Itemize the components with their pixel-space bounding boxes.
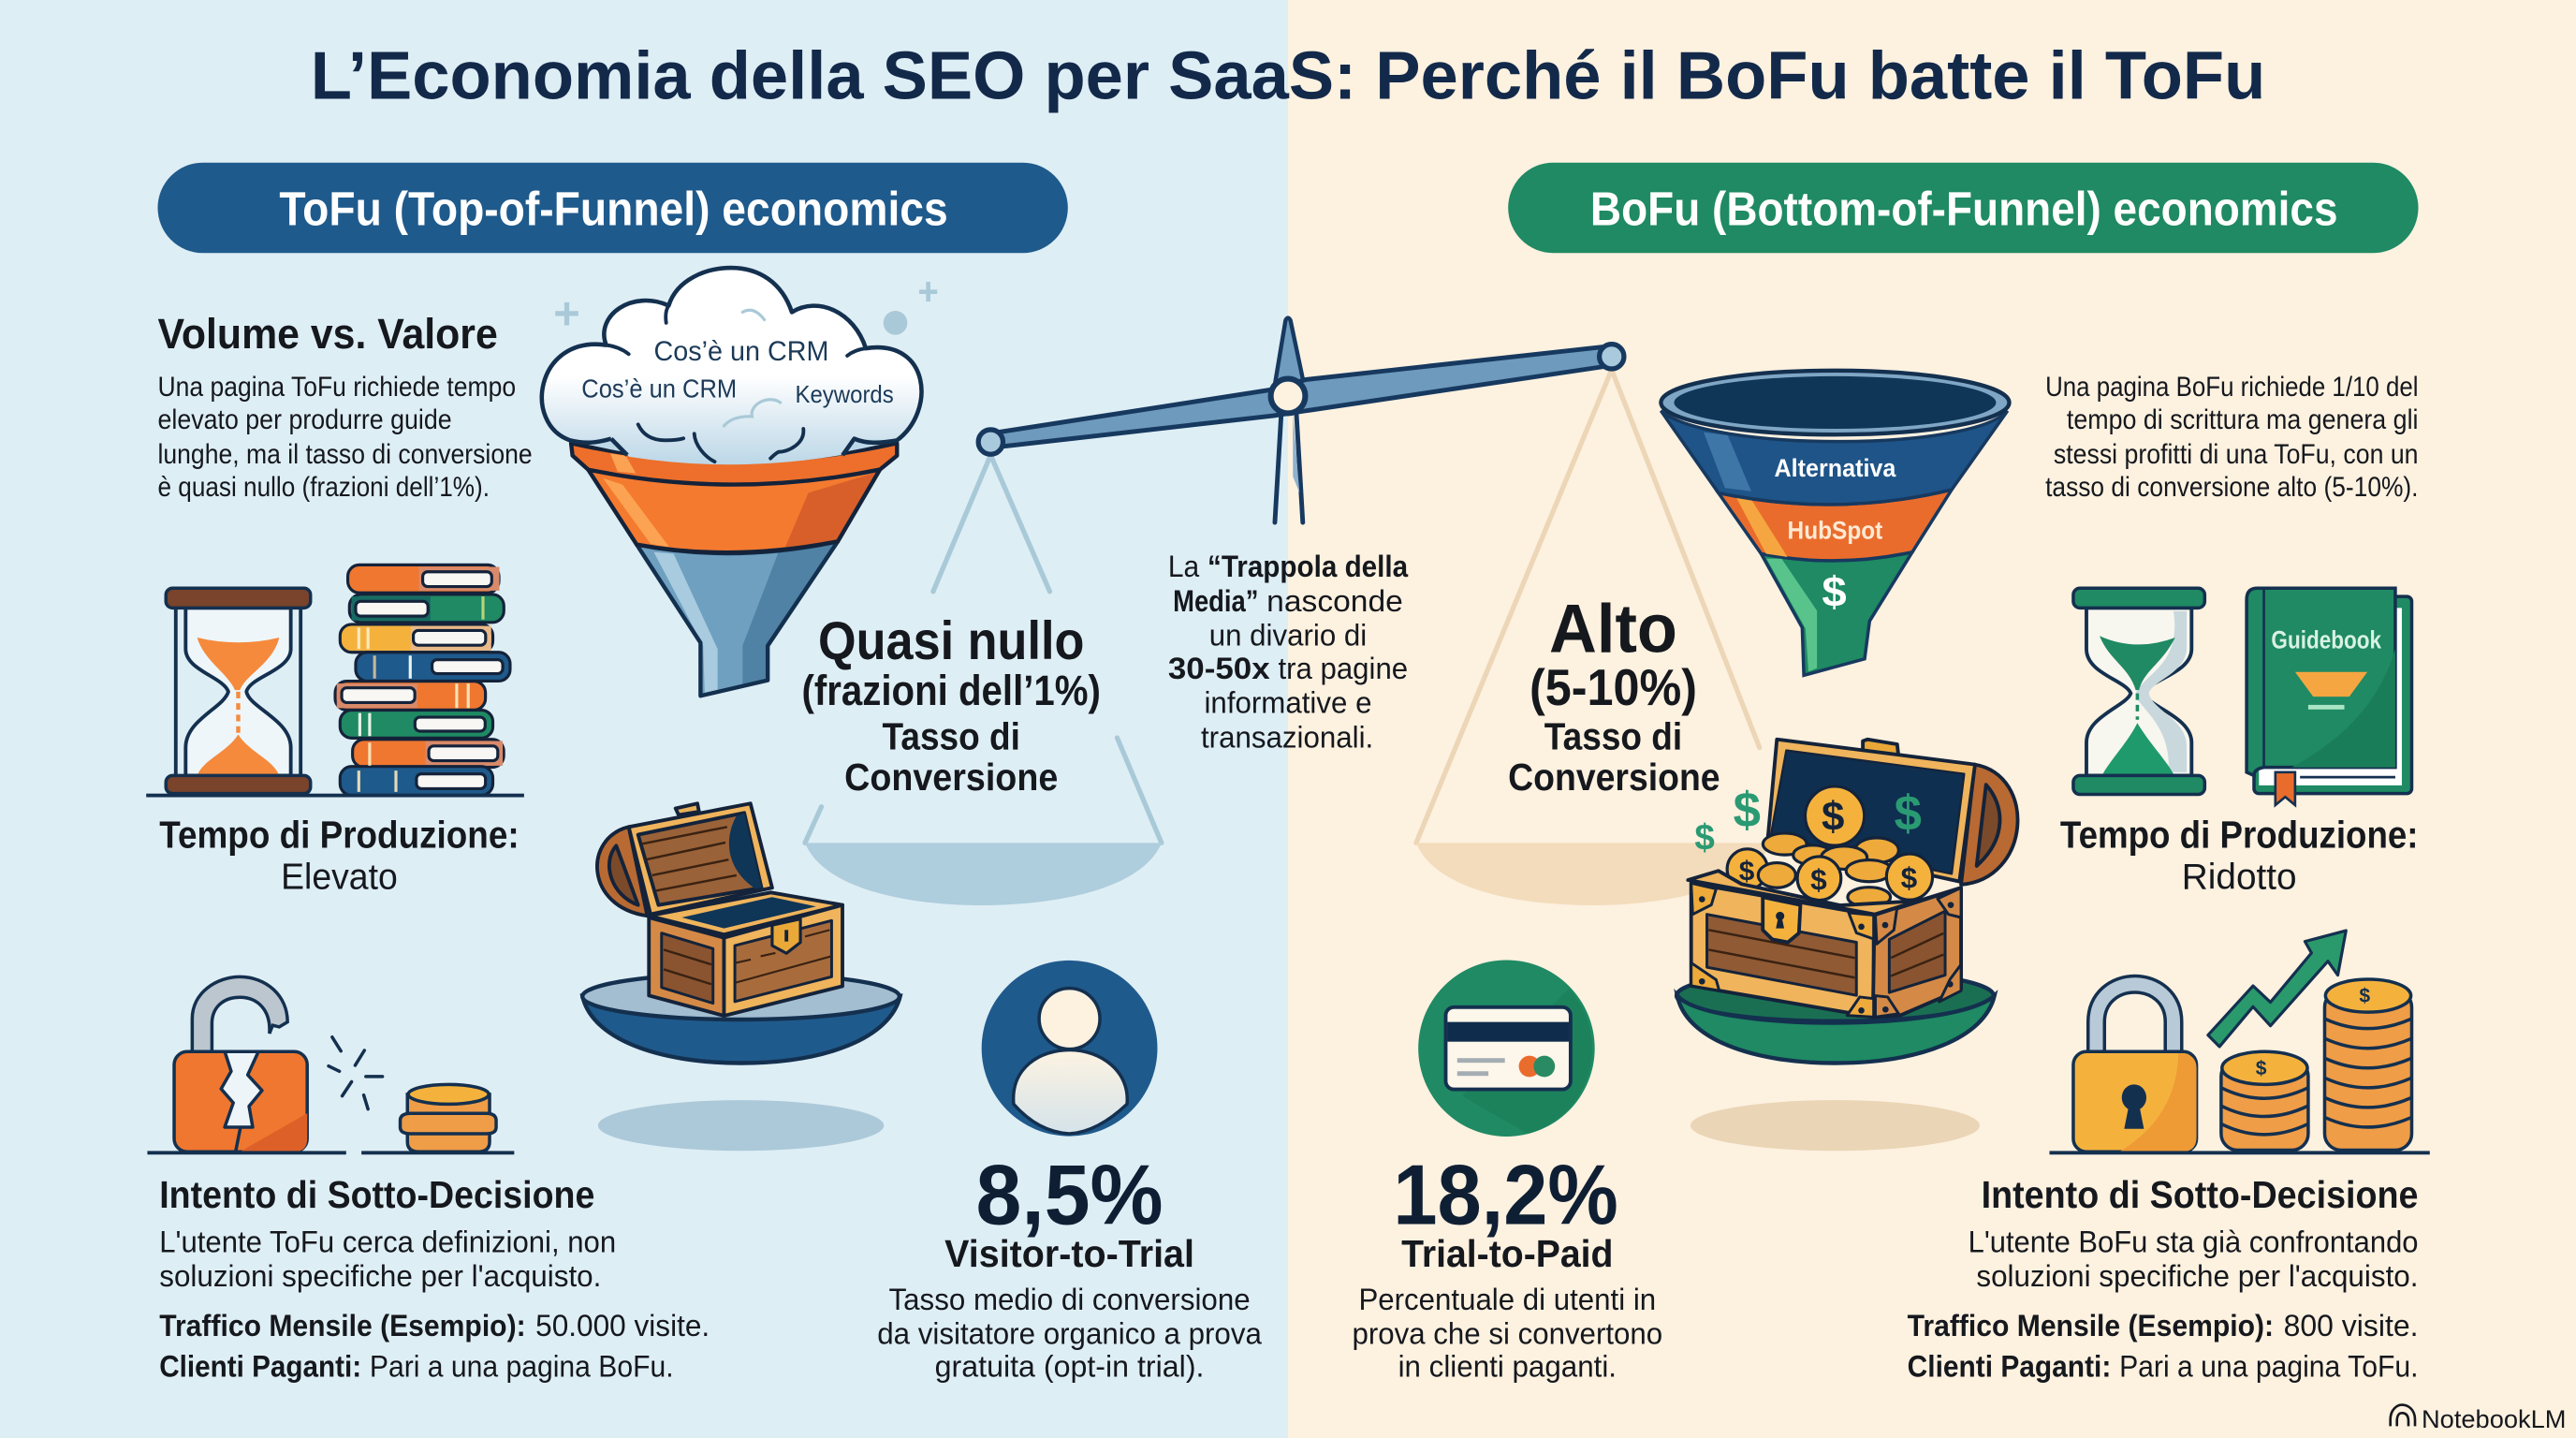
heading pill: BoFu: BoFu (Bottom-of-Funnel) economics <box>1590 182 2338 235</box>
callout: Quasi nullo conversion <box>801 611 1101 799</box>
text block: Intento ToFu: Traffico Mensile (Esempio): <box>159 1309 526 1343</box>
icon: BoFu funnel: HubSpot <box>1788 516 1882 545</box>
stat: Visitor-to-Trial: Tasso medio di conversione <box>889 1283 1251 1316</box>
ground lines: left lock <box>147 1151 514 1154</box>
icon: growth arrow <box>2208 931 2346 1047</box>
callout: Quasi nullo conversion: (frazioni dell’1%) <box>801 667 1101 714</box>
text block: Tempo di Produzione left: Tempo di Produzione: <box>159 814 520 857</box>
callout: Trappola della Media: Media” <box>1173 584 1258 618</box>
gold coins: $ <box>1822 794 1844 840</box>
text block: Intento BoFu <box>1908 1173 2419 1384</box>
cloud labels: Keywords <box>795 382 894 408</box>
callout: Quasi nullo conversion: Conversione <box>844 756 1058 799</box>
text block: Volume vs. Valore: è quasi nullo (frazioni dell’1%). <box>157 472 490 503</box>
cloud labels: Cos’è un CRM <box>581 374 737 404</box>
stat: Trial-to-Paid <box>1352 1147 1662 1384</box>
text block: Intento ToFu: Pari a una pagina BoFu. <box>370 1350 674 1384</box>
text block: Intento BoFu: soluzioni specifiche per l'acquisto. <box>1976 1259 2419 1293</box>
icon: coin stacks: $ <box>2256 1058 2267 1079</box>
heading pill: BoFu <box>1508 163 2419 253</box>
callout: Quasi nullo conversion: Tasso di <box>882 714 1020 757</box>
text block: Volume vs. Valore: Una pagina ToFu richiede tempo <box>157 372 516 403</box>
text block: Volume vs. Valore: Volume vs. Valore <box>157 310 498 358</box>
icon: coin stacks <box>2221 979 2411 1151</box>
callout: Alto conversion: Conversione <box>1508 756 1720 799</box>
text block: Intento BoFu: L'utente BoFu sta già confrontando <box>1969 1225 2419 1258</box>
callout: Alto conversion: (5-10%) <box>1530 659 1697 716</box>
text block: Intento BoFu: 800 visite. <box>2284 1309 2419 1343</box>
callout: Alto conversion <box>1508 590 1720 799</box>
text block: Intento ToFu: soluzioni specifiche per l'acquisto. <box>159 1259 601 1293</box>
money signs: $ <box>1734 783 1761 838</box>
scale: beam and pivot <box>978 318 1624 522</box>
chest body <box>649 892 842 1016</box>
text block: Tempo di Produzione right: Ridotto <box>2182 857 2297 897</box>
callout: Trappola della Media: informative e <box>1204 686 1372 720</box>
chest lid <box>1767 740 2018 885</box>
icon: BoFu funnel: Alternativa <box>1775 453 1896 482</box>
text block: BoFu description: tasso di conversione alto (5-10%). <box>2045 472 2419 503</box>
icon: orange hourglass <box>166 588 311 794</box>
text block: Intento BoFu: Intento di Sotto-Decisione <box>1982 1173 2419 1216</box>
callout: Trappola della Media: tra pagine <box>1278 652 1408 685</box>
callout: Trappola della Media <box>1168 550 1409 755</box>
text block: BoFu description: Una pagina BoFu richiede 1/10 del <box>2045 372 2419 403</box>
stat: Trial-to-Paid: prova che si convertono <box>1352 1317 1662 1351</box>
callout: Trappola della Media: un divario di <box>1209 619 1367 653</box>
text block: Intento ToFu <box>159 1173 710 1384</box>
icon: stack of books <box>335 565 510 795</box>
icon: small coin stack <box>401 1084 496 1152</box>
stat: Trial-to-Paid: Percentuale di utenti in <box>1358 1283 1656 1316</box>
text block: BoFu description: stessi profitti di una ToFu, con un <box>2054 439 2419 470</box>
chest body <box>1688 871 1961 1017</box>
text block: Tempo di Produzione left <box>159 814 520 897</box>
gold coins: $ <box>1901 861 1918 895</box>
cloud labels: Cos’è un CRM <box>654 336 828 367</box>
text block: Tempo di Produzione right: Tempo di Produzione: <box>2060 814 2419 857</box>
text block: Intento ToFu: 50.000 visite. <box>535 1309 710 1343</box>
stat: Visitor-to-Trial <box>877 1147 1263 1384</box>
stat: Visitor-to-Trial: da visitatore organico a prova <box>877 1317 1263 1351</box>
money signs <box>1694 783 1761 858</box>
callout: Trappola della Media: 30-50x <box>1168 652 1270 685</box>
icon: Guidebook <box>2247 588 2411 805</box>
scale: left pan and strings <box>805 455 1162 905</box>
bowl shadow <box>598 1100 884 1151</box>
decorative sparkles near cloud <box>555 282 937 335</box>
callout: Trappola della Media: La <box>1168 550 1200 583</box>
icon: green hourglass <box>2073 588 2204 795</box>
heading pill: ToFu: ToFu (Top-of-Funnel) economics <box>279 182 948 235</box>
background: right BoFu panel <box>1288 0 2576 1438</box>
text block: Volume vs. Valore: elevato per produrre guide <box>157 404 452 435</box>
text block: Intento BoFu: Pari a una pagina ToFu. <box>2119 1350 2419 1384</box>
ground line: left production <box>146 794 524 798</box>
callout: Trappola della Media: “Trappola della <box>1208 550 1409 583</box>
logo: NotebookLM: NotebookLM <box>2422 1404 2566 1433</box>
text block: BoFu description: tempo di scrittura ma genera gli <box>2067 404 2419 435</box>
stat: Visitor-to-Trial: Visitor-to-Trial <box>944 1232 1194 1275</box>
icon: bowl and chest BoFu <box>1676 740 2018 1151</box>
icon: user circle <box>982 961 1157 1137</box>
title: L’Economia della SEO per SaaS: Perché il BoFu batte il ToFu <box>311 38 2265 113</box>
gold coins: $ <box>1739 857 1755 888</box>
heading pill: ToFu <box>157 163 1068 253</box>
icon: closed padlock <box>2073 976 2197 1152</box>
stat: Visitor-to-Trial: gratuita (opt-in trial). <box>935 1350 1204 1384</box>
chest lid: $ <box>1895 785 1922 841</box>
scale: right pan and strings <box>1416 370 1771 905</box>
bowl shadow <box>1690 1100 1980 1151</box>
icon: bowl and chest ToFu <box>582 803 900 1151</box>
text block: Intento BoFu: Clienti Paganti: <box>1908 1350 2111 1384</box>
icon: broken padlock <box>174 976 383 1152</box>
text block: BoFu description <box>2045 372 2419 503</box>
gold coins: $ <box>1810 862 1827 896</box>
ground line: right lock <box>2049 1151 2430 1154</box>
callout: Alto conversion: Alto <box>1549 590 1677 668</box>
callout: Trappola della Media: transazionali. <box>1201 721 1373 755</box>
icon: coin stacks: $ <box>2359 986 2370 1007</box>
text block: Intento ToFu: L'utente ToFu cerca definizioni, non <box>159 1225 616 1258</box>
background: left ToFu panel <box>0 0 1288 1438</box>
text block: Intento ToFu: Clienti Paganti: <box>159 1350 361 1384</box>
callout: Alto conversion: Tasso di <box>1544 714 1682 757</box>
money signs: $ <box>1694 817 1715 858</box>
stat: Visitor-to-Trial: 8,5% <box>976 1147 1164 1242</box>
stat: Trial-to-Paid: in clienti paganti. <box>1398 1350 1617 1384</box>
text block: Volume vs. Valore: lunghe, ma il tasso di conversione <box>157 439 533 470</box>
text block: Volume vs. Valore <box>157 310 533 503</box>
icon: credit card circle <box>1418 960 1595 1137</box>
callout: Trappola della Media: nasconde <box>1266 584 1403 618</box>
icon: BoFu funnel <box>1661 371 2009 675</box>
text block: Tempo di Produzione right <box>2060 814 2419 897</box>
corner plates <box>1691 883 1961 1017</box>
text block: Tempo di Produzione left: Elevato <box>281 857 398 897</box>
icon: Guidebook: Guidebook <box>2271 624 2382 653</box>
bowl <box>1676 970 1995 1064</box>
gold coins <box>1727 786 1933 907</box>
icon: ToFu funnel with cloud <box>542 268 921 696</box>
callout: Quasi nullo conversion: Quasi nullo <box>818 611 1084 671</box>
chest lid <box>597 803 772 916</box>
icon: BoFu funnel: $ <box>1822 568 1847 616</box>
stat: Trial-to-Paid: 18,2% <box>1393 1147 1618 1242</box>
cloud labels <box>581 336 894 408</box>
stat: Trial-to-Paid: Trial-to-Paid <box>1401 1232 1614 1275</box>
text block: Intento BoFu: Traffico Mensile (Esempio): <box>1908 1309 2274 1343</box>
bowl <box>582 974 900 1064</box>
text block: Intento ToFu: Intento di Sotto-Decisione <box>159 1173 594 1216</box>
